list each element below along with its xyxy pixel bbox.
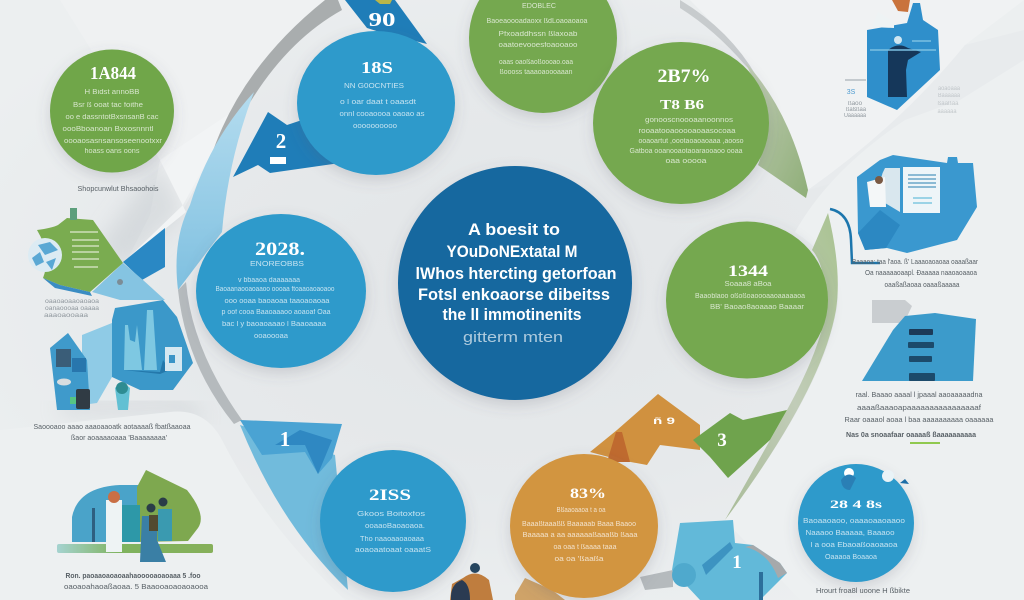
- illustration: blue figure panel top right: [845, 0, 940, 110]
- circle: central dark blue title: A boesit to: [468, 221, 560, 239]
- ribbon: green number 3: [693, 410, 787, 478]
- caption: document machine: oaaßaßaoaa oaaaßaaaaa: [884, 280, 960, 289]
- circle: green 2B7%: T8 B6: [660, 98, 704, 113]
- paper fold: right sheet: [725, 60, 1024, 600]
- caption: small text left of figure panel: ßaoo: [848, 101, 863, 107]
- caption: bars panel: raal. Baaao aaaal l jpaaal aaoaaaaadna: [856, 390, 983, 399]
- circle: green top: oaatoevooesfoaooaoo: [498, 42, 578, 49]
- caption: small gray lines near tag: [44, 299, 100, 319]
- ring band: pale blue left arc: [176, 92, 254, 290]
- circle: blue 2ISS: aoaoaatoaat oaaatS: [355, 547, 431, 554]
- circle: blue right bottom: Oaaaoa Boaaoa: [825, 554, 877, 561]
- circle: green 1344: 1344: [728, 263, 768, 280]
- circle: blue 2028: ENOREOBBS: [250, 261, 304, 268]
- caption: shelf illustration: [34, 422, 191, 442]
- circle: blue 18S: 18S: [361, 58, 393, 77]
- circle: green top: ßoooss taaaoaoooaaan: [500, 69, 573, 76]
- illustration: bottom people with orange fold: [450, 563, 565, 600]
- caption: small text left of figure panel: [844, 89, 867, 119]
- circle: green 2B7%: rooaatooaooooaoaasocoaa: [638, 128, 736, 135]
- caption: document machine: [852, 257, 978, 289]
- circle: green 2B7%: ooaoartut ,oootaoaoaoaaa ,aooso: [638, 138, 744, 145]
- circle: green top: Pfxoaddhssn ßlaxoab: [498, 31, 578, 38]
- caption: document machine: Baaaoa: taa l'aoa. ß' Laaaoaoaoaa oaaaßaar: [852, 257, 978, 266]
- circle: green 1A844: H Bidst annoBB: [84, 89, 140, 96]
- circle: blue 2ISS: [320, 450, 466, 592]
- circle: green 1A844: oooBboanoan Bxxosnnntl: [62, 126, 154, 133]
- circle: green 2B7%: gonooscnoooaanoonnos: [645, 117, 734, 124]
- caption: faint text right of figure panel: ßaaßaa: [938, 101, 959, 107]
- circle: green 2B7%: [593, 42, 769, 204]
- illustration: blue shelf with chart: [50, 300, 193, 410]
- illustration: blue document machine: [830, 155, 977, 263]
- circle: green 1A844: oooaosasnsansoseenootxxr: [64, 138, 163, 145]
- circle: blue 2028: bac l y baoaoaaao l Baaoaaaa: [222, 321, 326, 328]
- caption: faint text right of figure panel: [938, 86, 961, 115]
- circle: blue 2ISS: 2ISS: [369, 487, 411, 504]
- circle: blue 18S: [297, 31, 455, 175]
- circle: blue 18S: oooooooooo: [353, 123, 397, 130]
- illustration: green tag with globe: [28, 208, 123, 296]
- caption: right bottom circle: Hrourt froa8l uoone H ßbikte: [816, 586, 910, 595]
- circle: green top: [469, 0, 617, 113]
- ring band: green upper right arc: [745, 62, 808, 198]
- paper fold: upper right sheet: [690, 0, 1024, 190]
- ribbon: number 2: [233, 112, 340, 177]
- circle: green 1344: Soaaa8 aBoa: [724, 281, 772, 288]
- circle: green 1344: Baaoblaoo oßoßoaoooaaoaaaaaoa: [695, 293, 805, 300]
- circle: blue right bottom: Naaaoo Baaaaa, Baaaoo: [806, 530, 895, 537]
- caption: faint text right of figure panel: aoaoaaa: [938, 86, 961, 92]
- circle: orange 83%: Bßaaoaaoa t a oa: [556, 507, 606, 514]
- caption: small text left of figure panel: 3S: [847, 89, 856, 96]
- circle: green top: Baoeaoooadaoxx ßdLoaoaoaoa: [486, 18, 588, 25]
- ring band: gray upper left arc: [202, 0, 342, 190]
- circle: central dark blue title: lWhos htercting getorfoan: [416, 265, 616, 283]
- circle: blue right bottom: Baoaaoaoo, oaaaoaaoaaoo: [803, 518, 905, 525]
- ribbon: green number 3: 3: [717, 430, 727, 451]
- caption: small text left of figure panel: ßaßßaa: [846, 107, 867, 113]
- paper fold: upper left sheet: [0, 0, 335, 270]
- ring band: lower left arc: [178, 282, 242, 424]
- circle: orange 83%: 83%: [570, 486, 606, 502]
- caption: green circle: Shopcunwlut Bhsaoohois: [78, 184, 159, 193]
- illustration: people with leaf: [57, 470, 213, 562]
- circle: green top: oaas oaoßaoßoooao.oaa: [499, 59, 573, 66]
- circle: green 1A844: 1A844: [90, 63, 136, 83]
- circle: central dark blue title: [398, 166, 632, 400]
- circle: green 1A844: Bsr ß ooat tac foithe: [73, 102, 143, 109]
- ribbon: number 90: [345, 0, 427, 44]
- ring band: lower blue arc: [240, 425, 348, 590]
- circle: green 1344: [666, 222, 828, 378]
- circle: blue 2ISS: Gkoos Boitoxfos: [357, 511, 426, 518]
- caption: bars panel: Nas 0a snoaafaar oaaaaß ßaaaaaaaaaa: [846, 430, 977, 439]
- circle: blue 2028: ooaoooaa: [254, 333, 288, 340]
- circle: blue 2028: p oof cooa Baaoaaaoo aoaoaf Oaa: [222, 309, 331, 316]
- circle: blue 18S: o l oar daat t oaasdt: [340, 99, 416, 106]
- circle: blue 18S: onnl cooaoooa oaoao as: [340, 111, 425, 118]
- caption: faint text right of figure panel: Baaaaaa: [938, 93, 961, 99]
- circle: green top: EDOBLEC: [522, 3, 556, 10]
- circle: blue right bottom: [798, 464, 914, 582]
- ring band: gray upper right arc: [680, 0, 757, 77]
- circle: green 1A844: hoass oans oons: [84, 148, 140, 155]
- caption: shelf illustration: Saoooaoo aaao aaaoaaoatk aotaaaaß fbatßaaoaa: [34, 422, 191, 431]
- circle: green 1A844: [50, 50, 174, 172]
- ribbon: number 90: 90: [368, 9, 396, 31]
- caption: small gray lines near tag: aaaoaooaaa: [44, 313, 89, 319]
- illustration: bottom blue object with 1: 1: [732, 552, 742, 573]
- circle: orange 83%: oa oaa t ßaaaa taaa: [554, 544, 617, 551]
- circle: central dark blue title: gitterm mten: [463, 329, 563, 346]
- circle: blue 2028: v bbaaoa daaaaaaa: [238, 277, 300, 284]
- ribbon: number 2: 2: [276, 129, 286, 153]
- caption: faint text right of figure panel: aaaaaa: [938, 109, 957, 115]
- caption: small gray lines near tag: oanaoooaa oaaaa: [45, 306, 100, 312]
- circle: green 2B7%: Gatboa ooanooaotaoaraooaoo ooaa: [630, 148, 743, 155]
- circle: green 2B7%: 2B7%: [658, 66, 710, 87]
- circle: blue 2ISS: Tho naaoaaoaoaaa: [360, 536, 424, 543]
- caption: people illustration: oaoaoahaoaßaoaa. 5 Baaooaoaoaoaooa: [64, 582, 209, 591]
- caption: small gray lines near tag: oaaoaoaaoaoaoa: [45, 299, 100, 305]
- circle: blue 18S: NN G0OCNTIES: [344, 83, 404, 90]
- circle: green 2B7%: oaa ooooa: [666, 158, 707, 165]
- circle: blue 2ISS: ooaaoBaoaoaoa.: [365, 523, 425, 530]
- circle: blue right bottom: l a ooa Ebaoaßoaoaaoa: [810, 542, 898, 549]
- caption: shelf illustration: ßaor aoaaaaoaaa 'Baaaaaaaa': [71, 433, 168, 442]
- circle: central dark blue title: YOuDoNExtatal M: [446, 243, 578, 261]
- ribbon: number 1 lower left: 1: [280, 427, 290, 451]
- circle: orange 83%: Baaaaa a aa aaaaaaßaaaßb ßaaa: [522, 532, 638, 539]
- circle: green 1A844: oo e dassntotBxsnsanB cac: [66, 114, 159, 121]
- caption: bars panel: [844, 390, 994, 444]
- illustration: blue triangular fold: [92, 228, 165, 300]
- ribbon: number 1 lower left: [240, 420, 342, 474]
- ring band: green lower right arc: [725, 213, 838, 520]
- illustration: bottom blue object with 1: [640, 520, 787, 600]
- caption: small text left of figure panel: Uaaaaaa: [844, 113, 867, 119]
- circle: orange 83%: [510, 454, 658, 598]
- caption: bars panel: Raar oaaaol aoaa l baa aaaaaaaaaa oaaaaaa: [844, 415, 994, 424]
- circle: central dark blue title: the ll immotinenits: [442, 306, 582, 324]
- ribbon: orange mountain: [590, 394, 700, 465]
- circle: green 1344: BB' Baoao8aoaaao Baaaar: [710, 304, 805, 311]
- circle: blue 2028: Baoaanaooaoaaoo oooaa ftoaaoaoaoaoo: [216, 286, 335, 293]
- caption: bars panel: aaaaßaaaoapaaaaaaaaaaaaaaaaf: [857, 403, 982, 412]
- circle: blue 2028: [196, 214, 366, 368]
- caption: people illustration: Ron. paoaaoaoaoaahaooooaoaoaaa 5 .foo: [66, 571, 201, 580]
- circle: blue right bottom: 28 4 8s: [830, 497, 882, 511]
- caption: document machine: Oa naaaaaoaapl. Ðaaaaa naaoaoaaoa: [865, 268, 978, 277]
- circle: orange 83%: oa oa 'ßaaßa: [554, 556, 604, 563]
- caption: people illustration: [64, 571, 209, 591]
- illustration: blue panel with bars: [862, 300, 976, 381]
- circle: orange 83%: Baaaßtaaaßß Baaaaab Baaa Baaoo: [522, 521, 636, 528]
- circle: central dark blue title: Fotsl enkoaorse dibeitss: [418, 286, 610, 304]
- circle: blue 2028: 2028.: [255, 239, 305, 260]
- circle: blue 2028: ooo ooaa baoaoaa taaoaoaoaa: [224, 298, 330, 305]
- ribbon: orange mountain: ñ 9: [653, 416, 675, 426]
- paper fold: lower left sheet: [0, 405, 345, 600]
